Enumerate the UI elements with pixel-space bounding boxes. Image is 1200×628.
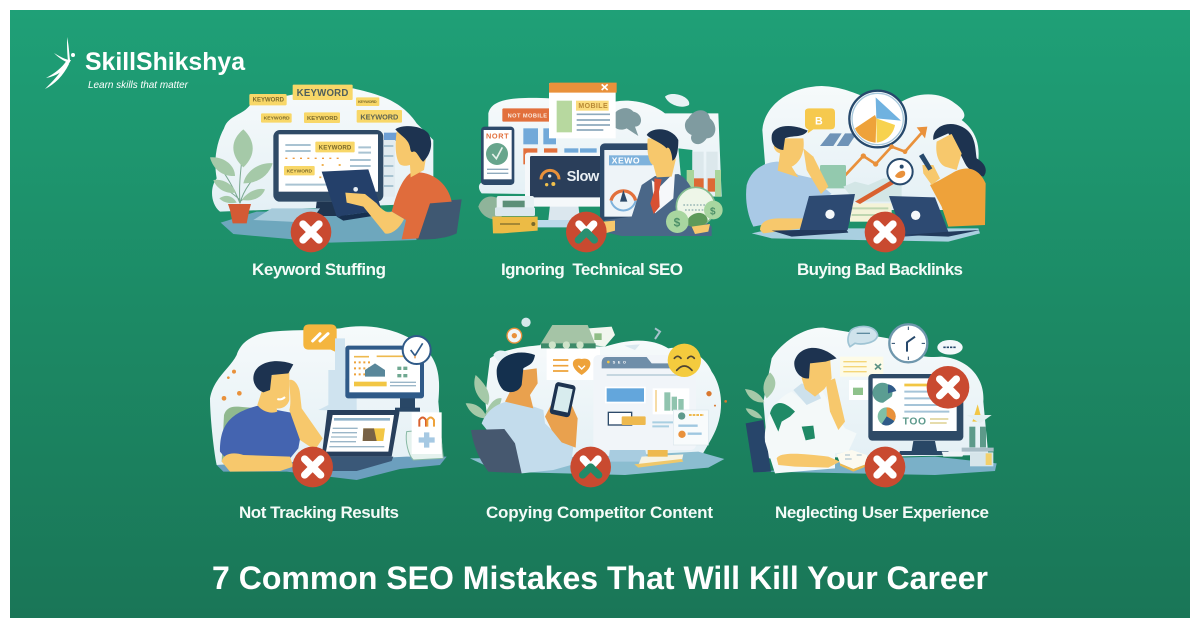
side card [673,410,708,445]
books [634,450,683,468]
man with phone [482,352,578,473]
red X on screen [927,366,969,409]
icon: logo figure [45,37,75,89]
laptop [317,410,399,471]
floating keyword tags: KEYWORD [297,88,348,99]
phone NORT [481,127,514,185]
rising trend line [841,127,927,180]
badge: red X [292,447,333,487]
magnifier pie chart [849,91,906,147]
clock [889,324,927,362]
plant [210,129,273,223]
decorative dots [706,391,727,407]
web grid tiles [502,108,597,164]
monitor: KEYWORD [287,168,312,174]
panel: copying competitor content [466,318,727,487]
logo wordmark: SkillShikshya [85,48,246,76]
illustration backdrop [210,326,443,465]
factory stacks [687,152,721,197]
medical bag [406,412,443,460]
label: neglecting user experience: Neglecting User Experience [775,503,989,522]
smoke clouds [612,108,715,144]
chair [417,199,462,239]
plant leaves [466,375,502,418]
phone NORT: NORT [486,132,509,141]
laptop [322,169,382,217]
floating keyword tags: KEYWORD [358,100,377,104]
label: copying competitor content: Copying Competitor Content [486,503,713,522]
floating keyword tags: KEYWORD [253,98,285,104]
panel: neglecting user experience [745,324,997,487]
floating keyword tags [249,85,402,123]
illustration backdrop [755,86,982,210]
tablet: XEWO [612,155,640,165]
tablet [600,143,663,221]
storefront [540,325,600,380]
striped bars [820,133,857,146]
panel: ignoring technical SEO [478,83,723,252]
floating MOBILE page [549,83,617,138]
desktop monitor Slow: Slow [567,169,600,185]
badge: red X [570,447,611,487]
skyline backdrop [318,338,357,412]
small magnifier [887,159,913,184]
background gap behind figure [678,148,692,185]
logo tagline: Learn skills that matter [88,79,188,91]
large monitor [593,355,696,462]
monitor [868,374,963,455]
label: buying bad backlinks: Buying Bad Backlinks [797,260,963,279]
panel: keyword stuffing [210,85,462,252]
floating keyword tags: KEYWORD [360,112,398,121]
man with laptop [746,126,855,237]
title: 7 Common SEO Mistakes That Will Kill Your Career [212,560,988,596]
illustration backdrop [479,98,722,197]
panel: not tracking results [210,324,447,487]
floor ellipse [470,452,724,475]
floating keyword tags: KEYWORD [307,116,338,122]
money medallion: $ [674,216,681,230]
monitor: KEYWORD [319,144,352,151]
panel: buying bad backlinks [746,86,986,252]
monitor: TOO [903,416,926,427]
badge: red X [291,212,331,252]
small oval bubble [937,340,963,355]
open book [837,450,868,472]
chair back [222,407,257,462]
person at laptop [345,126,452,239]
server stack [478,196,538,233]
speech bubble top [848,326,878,347]
decorative orange marks [222,370,242,401]
documents and chart [820,165,902,222]
sad face emoji [668,344,701,377]
woman with phone [889,124,986,237]
plant [745,372,775,418]
floating MOBILE page: MOBILE [578,103,608,110]
label: keyword stuffing: Keyword Stuffing [252,260,386,279]
label: ignoring technical SEO: Ignoring Technical SEO [501,260,683,279]
businessman [603,129,712,236]
desk [217,457,447,480]
badge: red X [865,212,905,252]
label: not tracking results: Not Tracking Results [239,503,399,522]
desk [765,457,997,475]
floating keyword tags: KEYWORD [264,116,290,122]
monitor [253,130,397,223]
badge: red X [865,447,905,487]
illustration backdrop [763,328,988,458]
tabletop items [942,404,994,466]
logo: SkillShikshya [45,37,246,91]
speech bubble B: B [815,116,823,128]
money medallion: $ [710,206,716,217]
desk [752,228,980,242]
chair [471,429,522,473]
desktop monitor Slow [525,153,612,227]
illustration backdrop [212,88,433,212]
money medallion [666,187,723,234]
man with hand on head [220,361,323,472]
speech bubble B [805,108,835,133]
badge: red X [566,212,607,252]
illustration backdrop [485,341,721,462]
man at desk [765,348,857,473]
chair [746,420,771,472]
large monitor: SEO [613,360,626,365]
small icons top [493,318,660,362]
desktop monitor [345,346,424,412]
speech bubble [303,324,337,352]
web grid tiles: NOT MOBILE [508,113,547,119]
clock [403,336,431,364]
floating docs [840,357,883,400]
desk [221,212,417,243]
